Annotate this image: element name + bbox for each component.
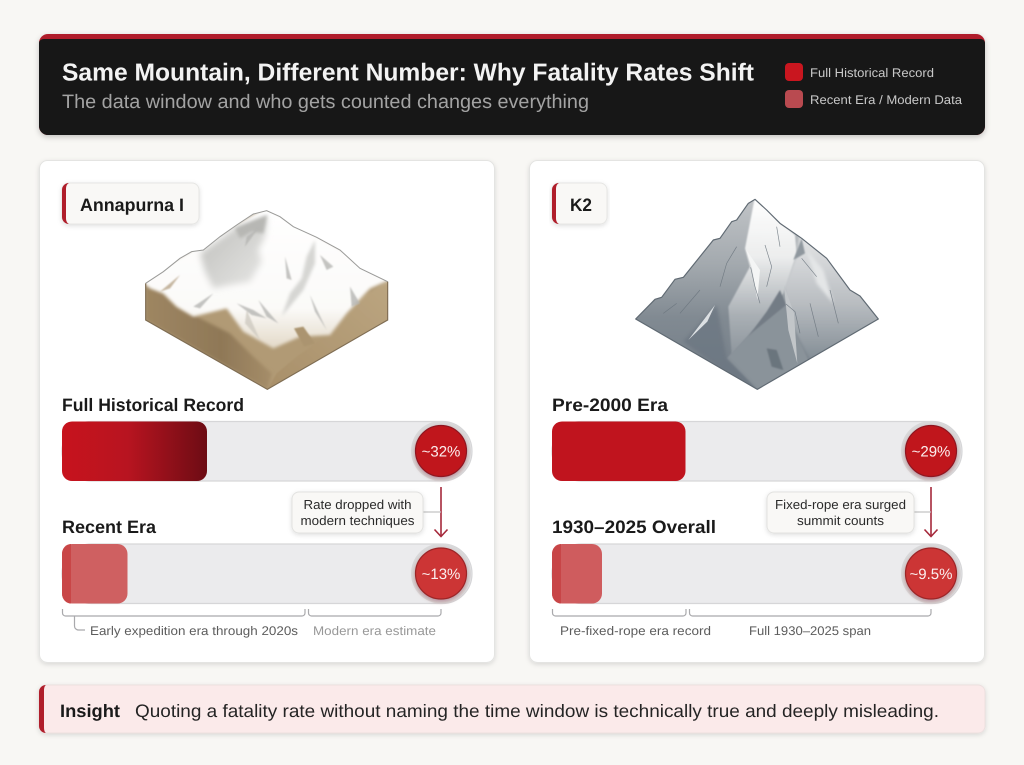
bracket: pre-fixed-rope era record: Pre-fixed-rope era record xyxy=(560,624,711,638)
label: Full Historical Record: Full Historical Record xyxy=(62,395,244,415)
arrow: drop to overall xyxy=(924,487,938,536)
subtitle: The data window and who gets counted changes everything xyxy=(62,91,589,113)
bar: 1930–2025 Overall ~9.5%: ~9.5% xyxy=(910,566,952,583)
illustration: Annapurna snow-capped block mountain xyxy=(140,207,393,393)
shading: exposed rock xyxy=(294,326,312,340)
bracket: early expedition era xyxy=(62,609,305,638)
label: Recent Era: Recent Era xyxy=(62,517,157,537)
name tag: Annapurna I xyxy=(62,183,199,224)
bar: Pre-2000 Era ~29%: ~29% xyxy=(912,444,950,460)
shading: dark shadow band and crevasses xyxy=(663,227,838,390)
panel: Annapurna I xyxy=(40,160,494,662)
illustration: K2 rocky pyramid mountain xyxy=(633,197,883,392)
legend xyxy=(785,63,962,108)
bracket: full 1930–2025 span xyxy=(690,609,931,638)
bracket: modern era estimate: Modern era estimate xyxy=(313,624,436,638)
bar: Full Historical Record ~32%: ~32% xyxy=(422,444,460,460)
insight bar xyxy=(39,685,985,733)
header banner xyxy=(39,34,985,135)
insight label: Insight xyxy=(60,701,120,721)
bracket: modern era estimate xyxy=(308,609,441,638)
name tag: K2 xyxy=(552,183,607,224)
bar: Recent Era ~13% xyxy=(62,544,472,604)
callout: Rate dropped with modern techniques xyxy=(292,492,441,533)
bracket: full 1930–2025 span: Full 1930–2025 span xyxy=(749,624,871,638)
title: Same Mountain, Different Number: Why Fatality Rates Shift xyxy=(62,60,754,86)
callout: Rate dropped with modern techniques: Rate dropped with xyxy=(304,497,412,512)
legend: Recent Era / Modern Data xyxy=(810,93,962,107)
bar: Recent Era ~13%: ~13% xyxy=(422,566,460,583)
bar: Pre-2000 Era ~29% xyxy=(552,421,962,481)
bar: 1930–2025 Overall ~9.5% xyxy=(552,544,962,604)
name tag: Annapurna I: Annapurna I xyxy=(80,195,184,215)
callout: Fixed-rope era surged summit counts xyxy=(767,492,931,533)
callout: Fixed-rope era surged summit counts: summit counts xyxy=(797,513,885,528)
bar: Full Historical Record ~32% xyxy=(62,421,472,481)
bracket: pre-fixed-rope era record xyxy=(552,609,711,638)
arrow: drop to recent era xyxy=(434,487,448,536)
legend: Full Historical Record xyxy=(810,66,934,80)
label: Pre-2000 Era: Pre-2000 Era xyxy=(552,395,669,415)
panel: K2 xyxy=(530,160,984,662)
label: 1930–2025 Overall: 1930–2025 Overall xyxy=(552,517,716,537)
insight text: Quoting a fatality rate without naming the time window is technically true and deeply misleading. xyxy=(135,701,939,721)
bracket: early expedition era: Early expedition era through 2020s xyxy=(90,624,298,638)
name tag: K2: K2 xyxy=(570,195,592,215)
shading: snow shadows xyxy=(160,215,360,340)
callout: Fixed-rope era surged summit counts: Fixed-rope era surged xyxy=(775,497,906,512)
callout: Rate dropped with modern techniques: modern techniques xyxy=(300,513,415,528)
